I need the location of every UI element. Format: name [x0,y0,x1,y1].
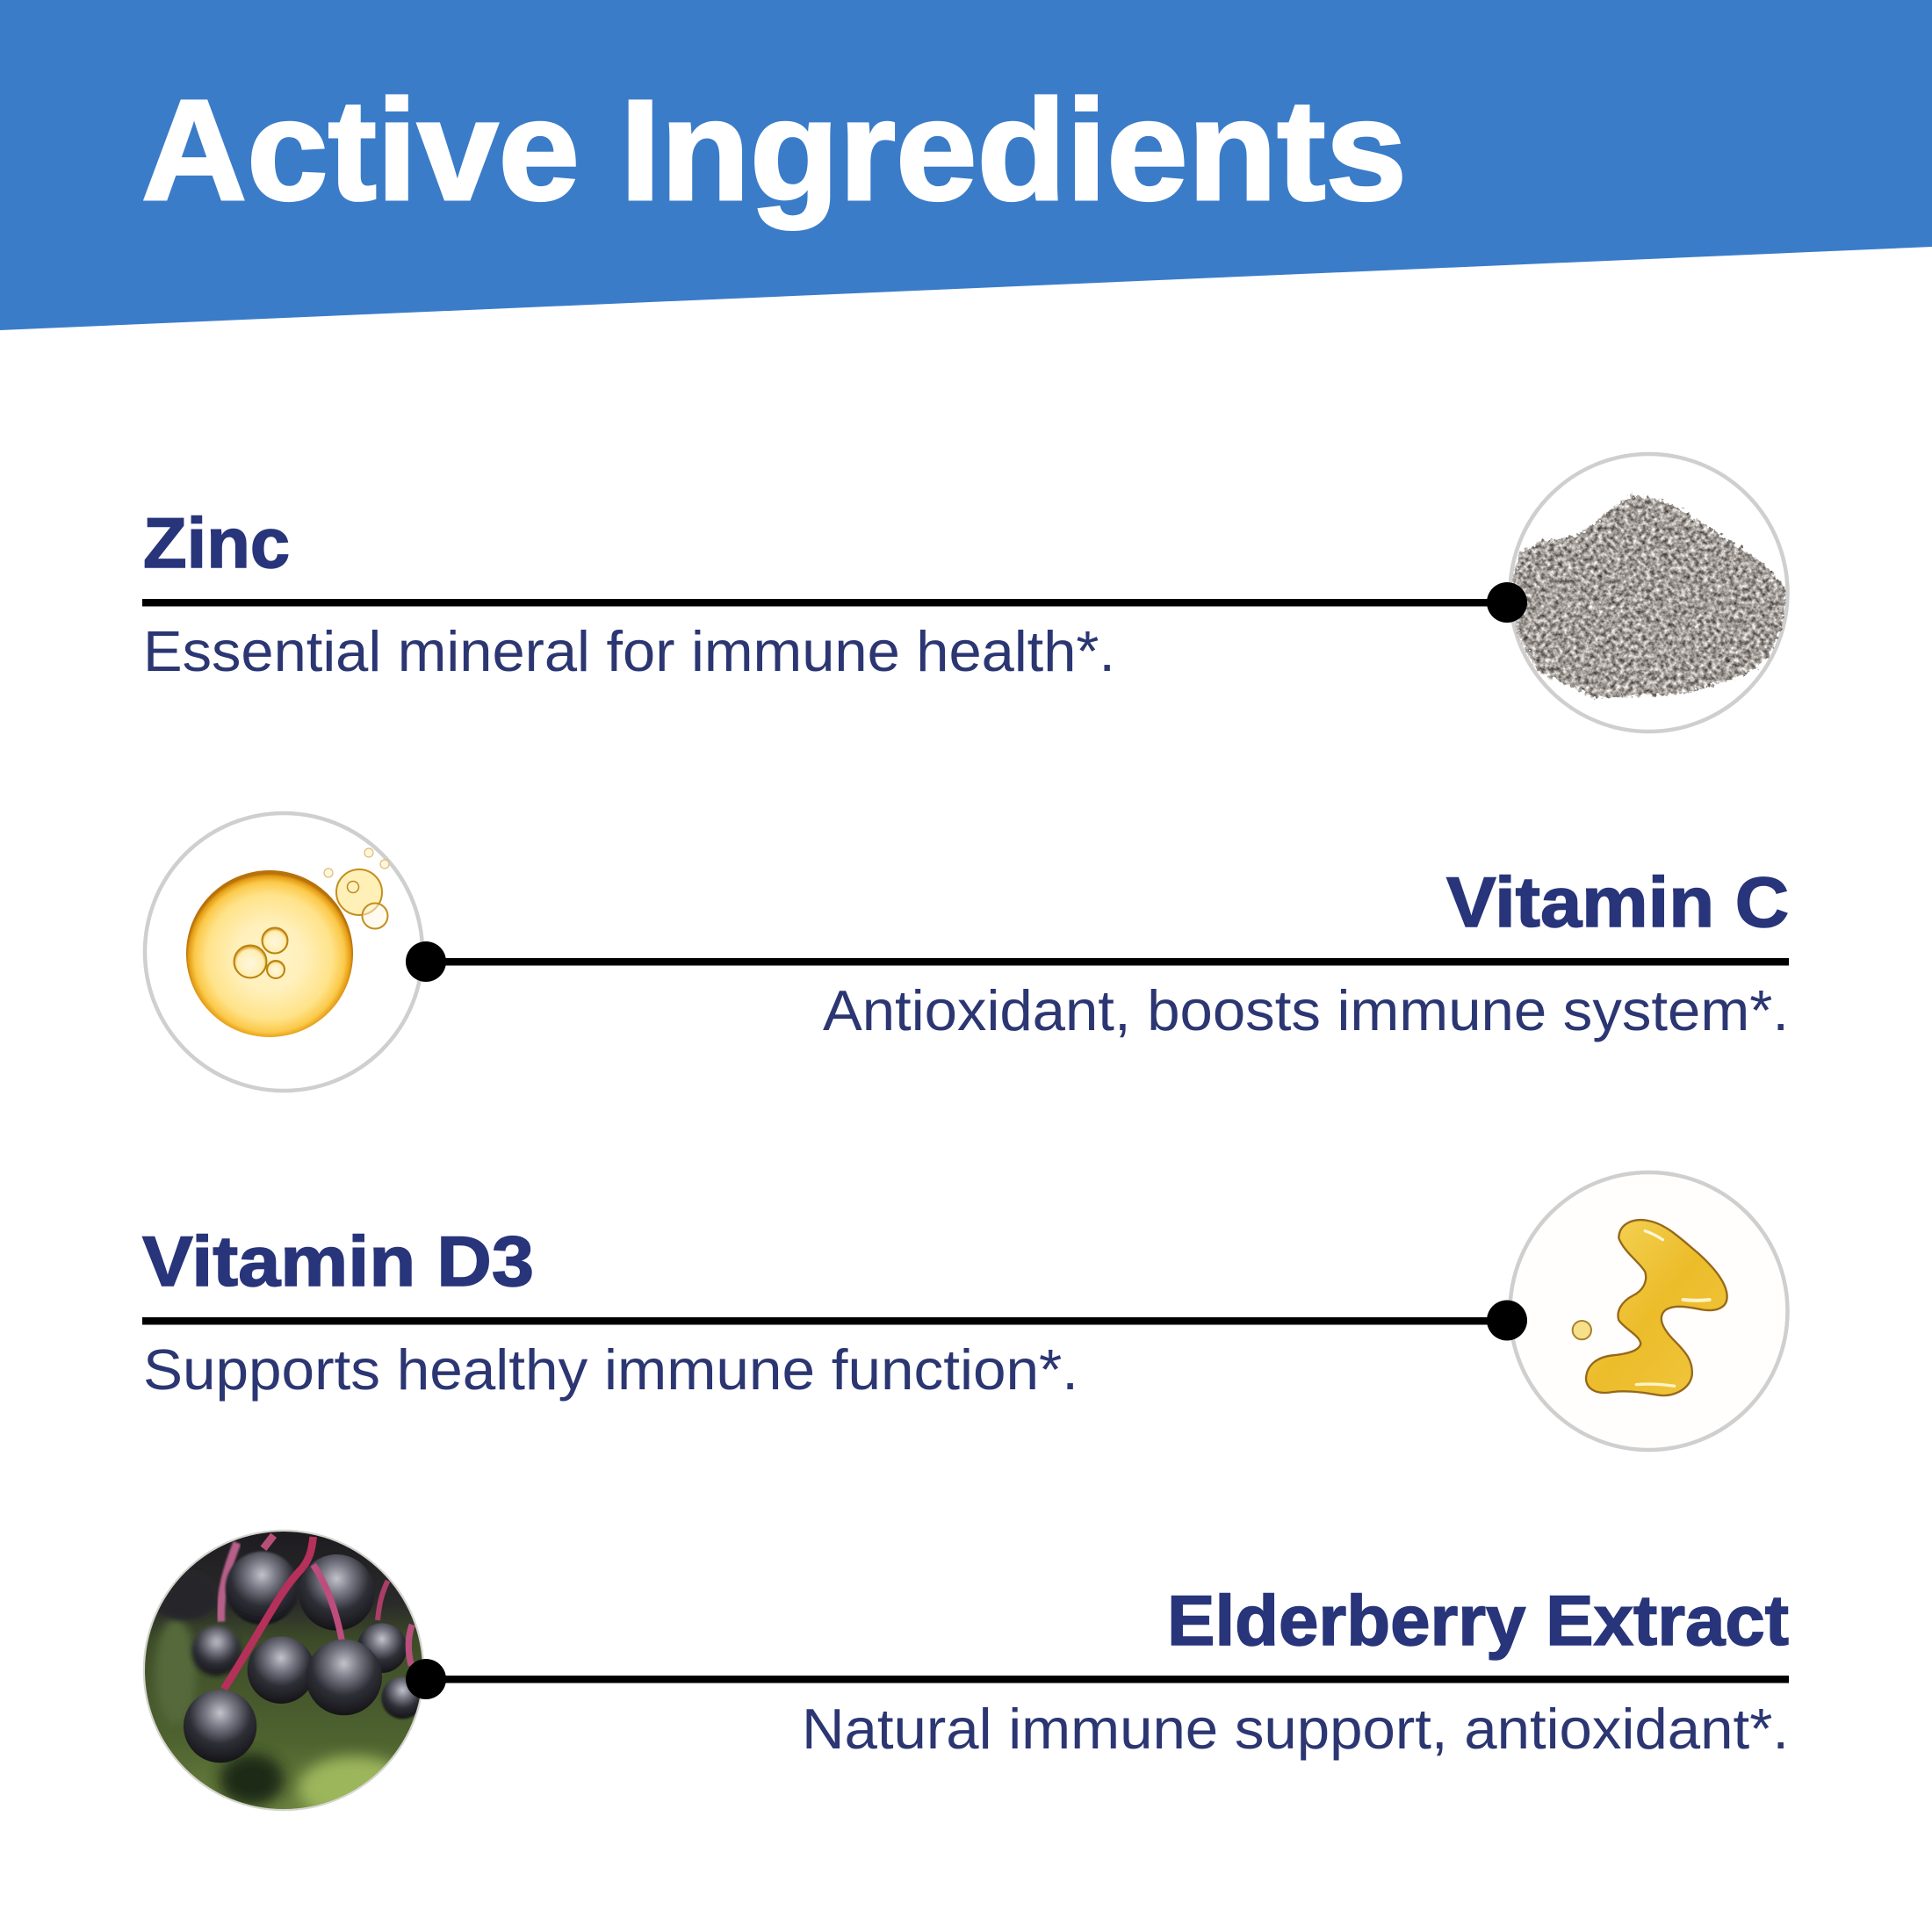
description: zinc: Essential mineral for immune health*. [143,619,1115,683]
connector line: vitamin d3 [142,1300,1527,1340]
image: zinc powder [1510,454,1788,732]
panel: vitamin c [145,813,1789,1091]
heading: vitamin c: Vitamin C [1446,863,1789,942]
panel: zinc [142,454,1788,732]
heading: elderberry extract: Elderberry Extract [1167,1582,1789,1661]
description: vitamin c: Antioxidant, boosts immune system*. [823,978,1789,1042]
connector line: zinc [142,582,1527,623]
connector line: vitamin c [406,941,1789,982]
connector line: elderberry extract [406,1659,1789,1699]
heading: zinc: Zinc [143,504,290,583]
heading: vitamin d3: Vitamin D3 [142,1222,534,1301]
panel: elderberry extract [141,1525,1789,1820]
image: oil droplets [145,813,422,1091]
panel: vitamin d3 [142,1172,1788,1450]
title: Active Ingredients [141,69,1407,230]
image: elderberries [141,1525,428,1820]
image: vitamin d3 oil [1510,1172,1788,1450]
header band [0,0,1932,330]
description: elderberry extract: Natural immune support, antioxidant*. [802,1697,1789,1761]
description: vitamin d3: Supports healthy immune function*. [143,1337,1078,1402]
